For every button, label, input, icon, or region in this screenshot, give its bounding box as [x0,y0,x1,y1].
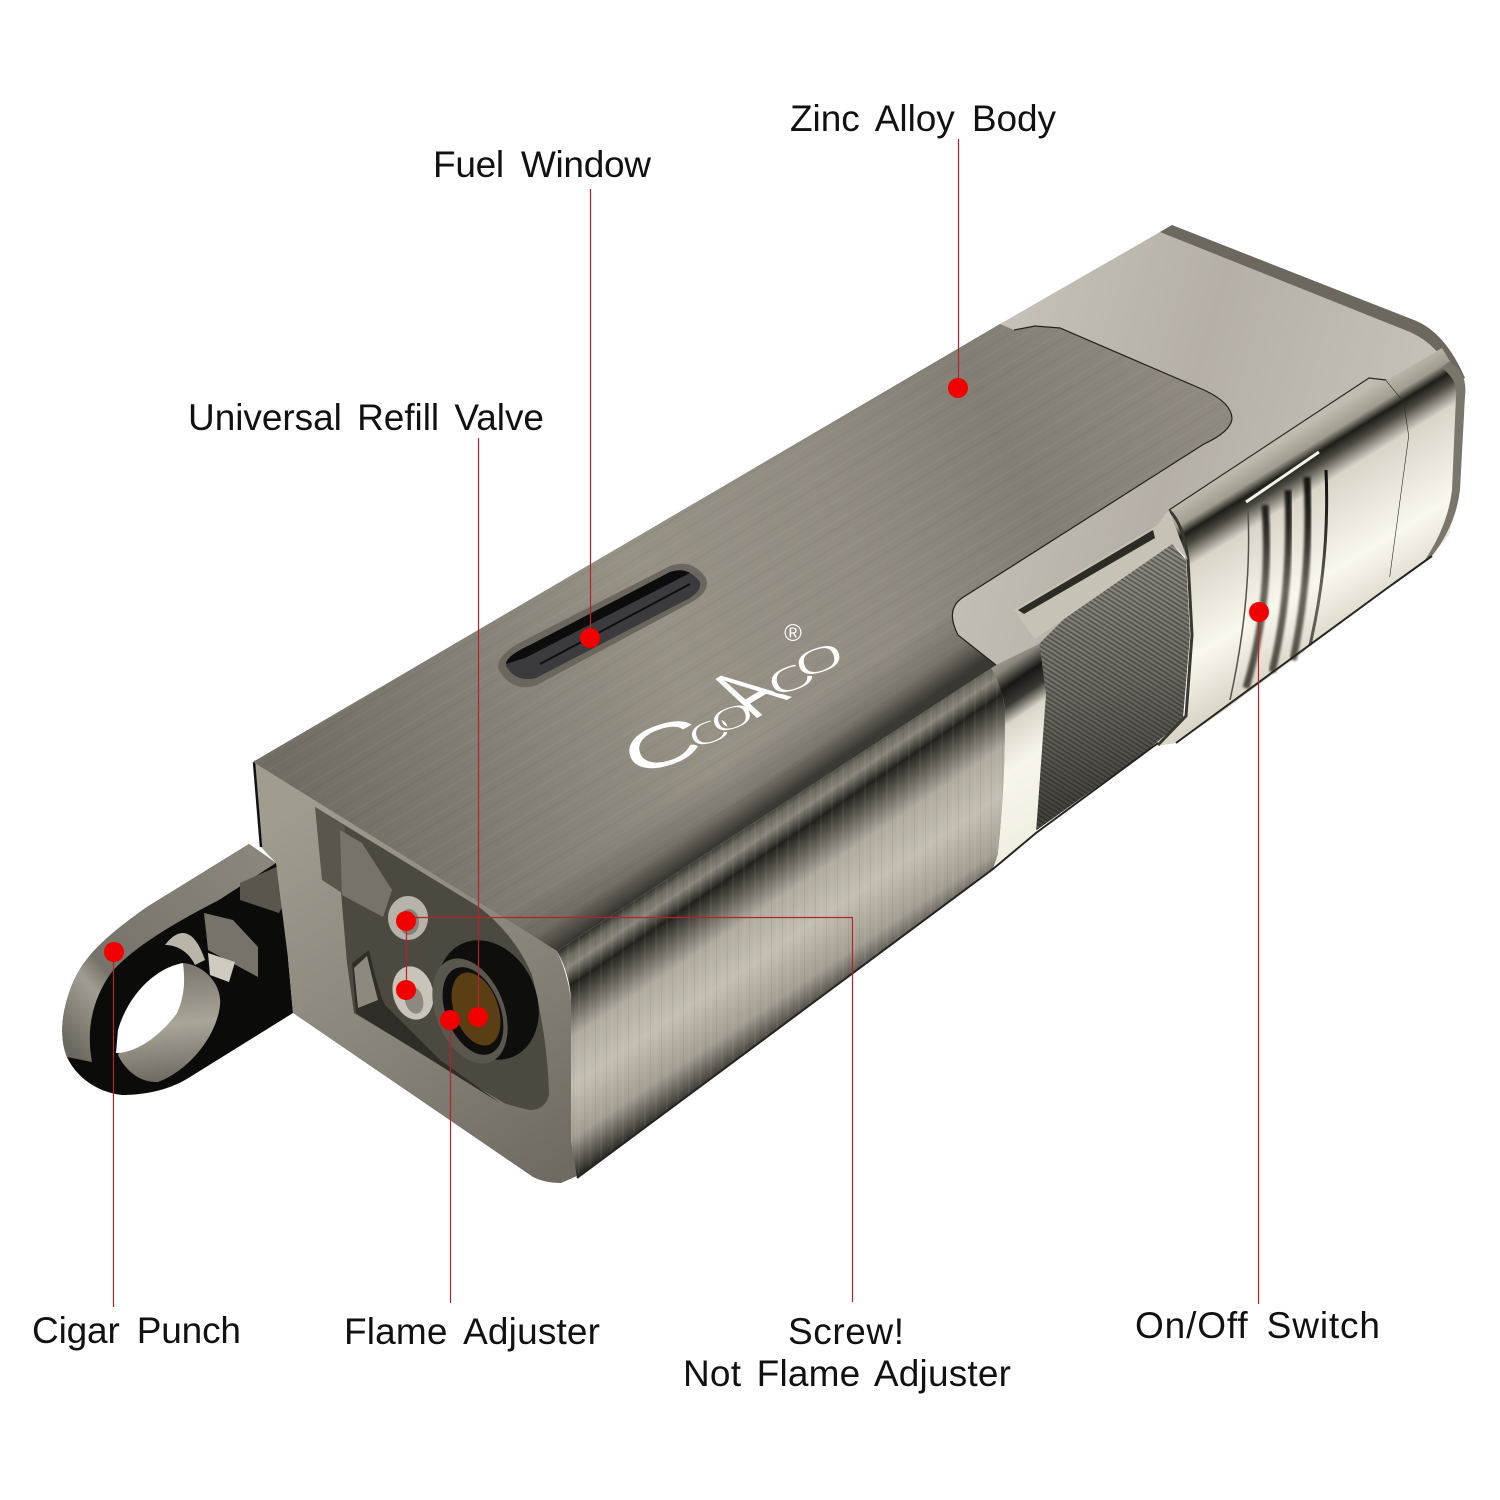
ribbed switch [1228,452,1328,707]
leader line [112,952,114,1307]
leader line [478,438,480,1017]
burner [418,924,558,1076]
label: Flame Adjuster [344,1311,600,1352]
bottom shadow edge [577,556,1432,1178]
label line two: Not Flame Adjuster [683,1353,1011,1394]
label: On/Off Switch [1135,1305,1380,1346]
product illustration: lighter [62,225,1465,1183]
callout: zinc alloy body [790,98,1056,398]
screws [388,896,428,940]
leader line [958,139,960,388]
brand logo: o [701,685,761,745]
label line one: Screw! [788,1311,904,1352]
opening lip [1014,510,1188,639]
leader line [406,918,852,1302]
fuel window [498,564,707,687]
top plate [253,225,1442,951]
cigar punch [62,844,383,1095]
leader line [450,1020,452,1303]
lower dot [396,980,416,1000]
label: Cigar Punch [32,1310,241,1351]
label: Universal Refill Valve [188,397,544,438]
dot [580,628,600,648]
brand logo: o [757,641,824,708]
callout: fuel window [433,144,651,648]
brand logo: A [683,657,810,727]
callout: cigar punch [32,942,241,1351]
brushed top panel [253,324,1232,951]
brand logo: o [784,623,851,690]
dot [104,942,124,962]
brand logo [615,623,851,789]
registered mark: ® [784,620,802,647]
brand logo: o [679,699,739,759]
callout: universal refill valve [188,397,544,1027]
upper dot [396,911,416,931]
callout: screw, not flame adjuster [396,911,1011,1394]
side face [557,665,1005,1178]
right end cap [1386,348,1465,589]
dot [1249,602,1269,622]
dot [948,378,968,398]
switch collar [1014,378,1409,747]
shiny band [989,640,1046,869]
end cap edge [1425,362,1465,560]
dot [468,1007,488,1027]
brand logo: C [615,703,710,789]
dot [440,1010,460,1030]
leader line [1258,612,1260,1304]
front end face [254,760,577,1183]
knurled wheel [1034,544,1190,832]
back rim [1160,225,1465,382]
callout: on/off switch [1135,602,1380,1346]
leader line [590,189,592,638]
label: Zinc Alloy Body [790,98,1056,139]
label: Fuel Window [433,144,651,185]
callout: flame adjuster [344,1010,600,1352]
